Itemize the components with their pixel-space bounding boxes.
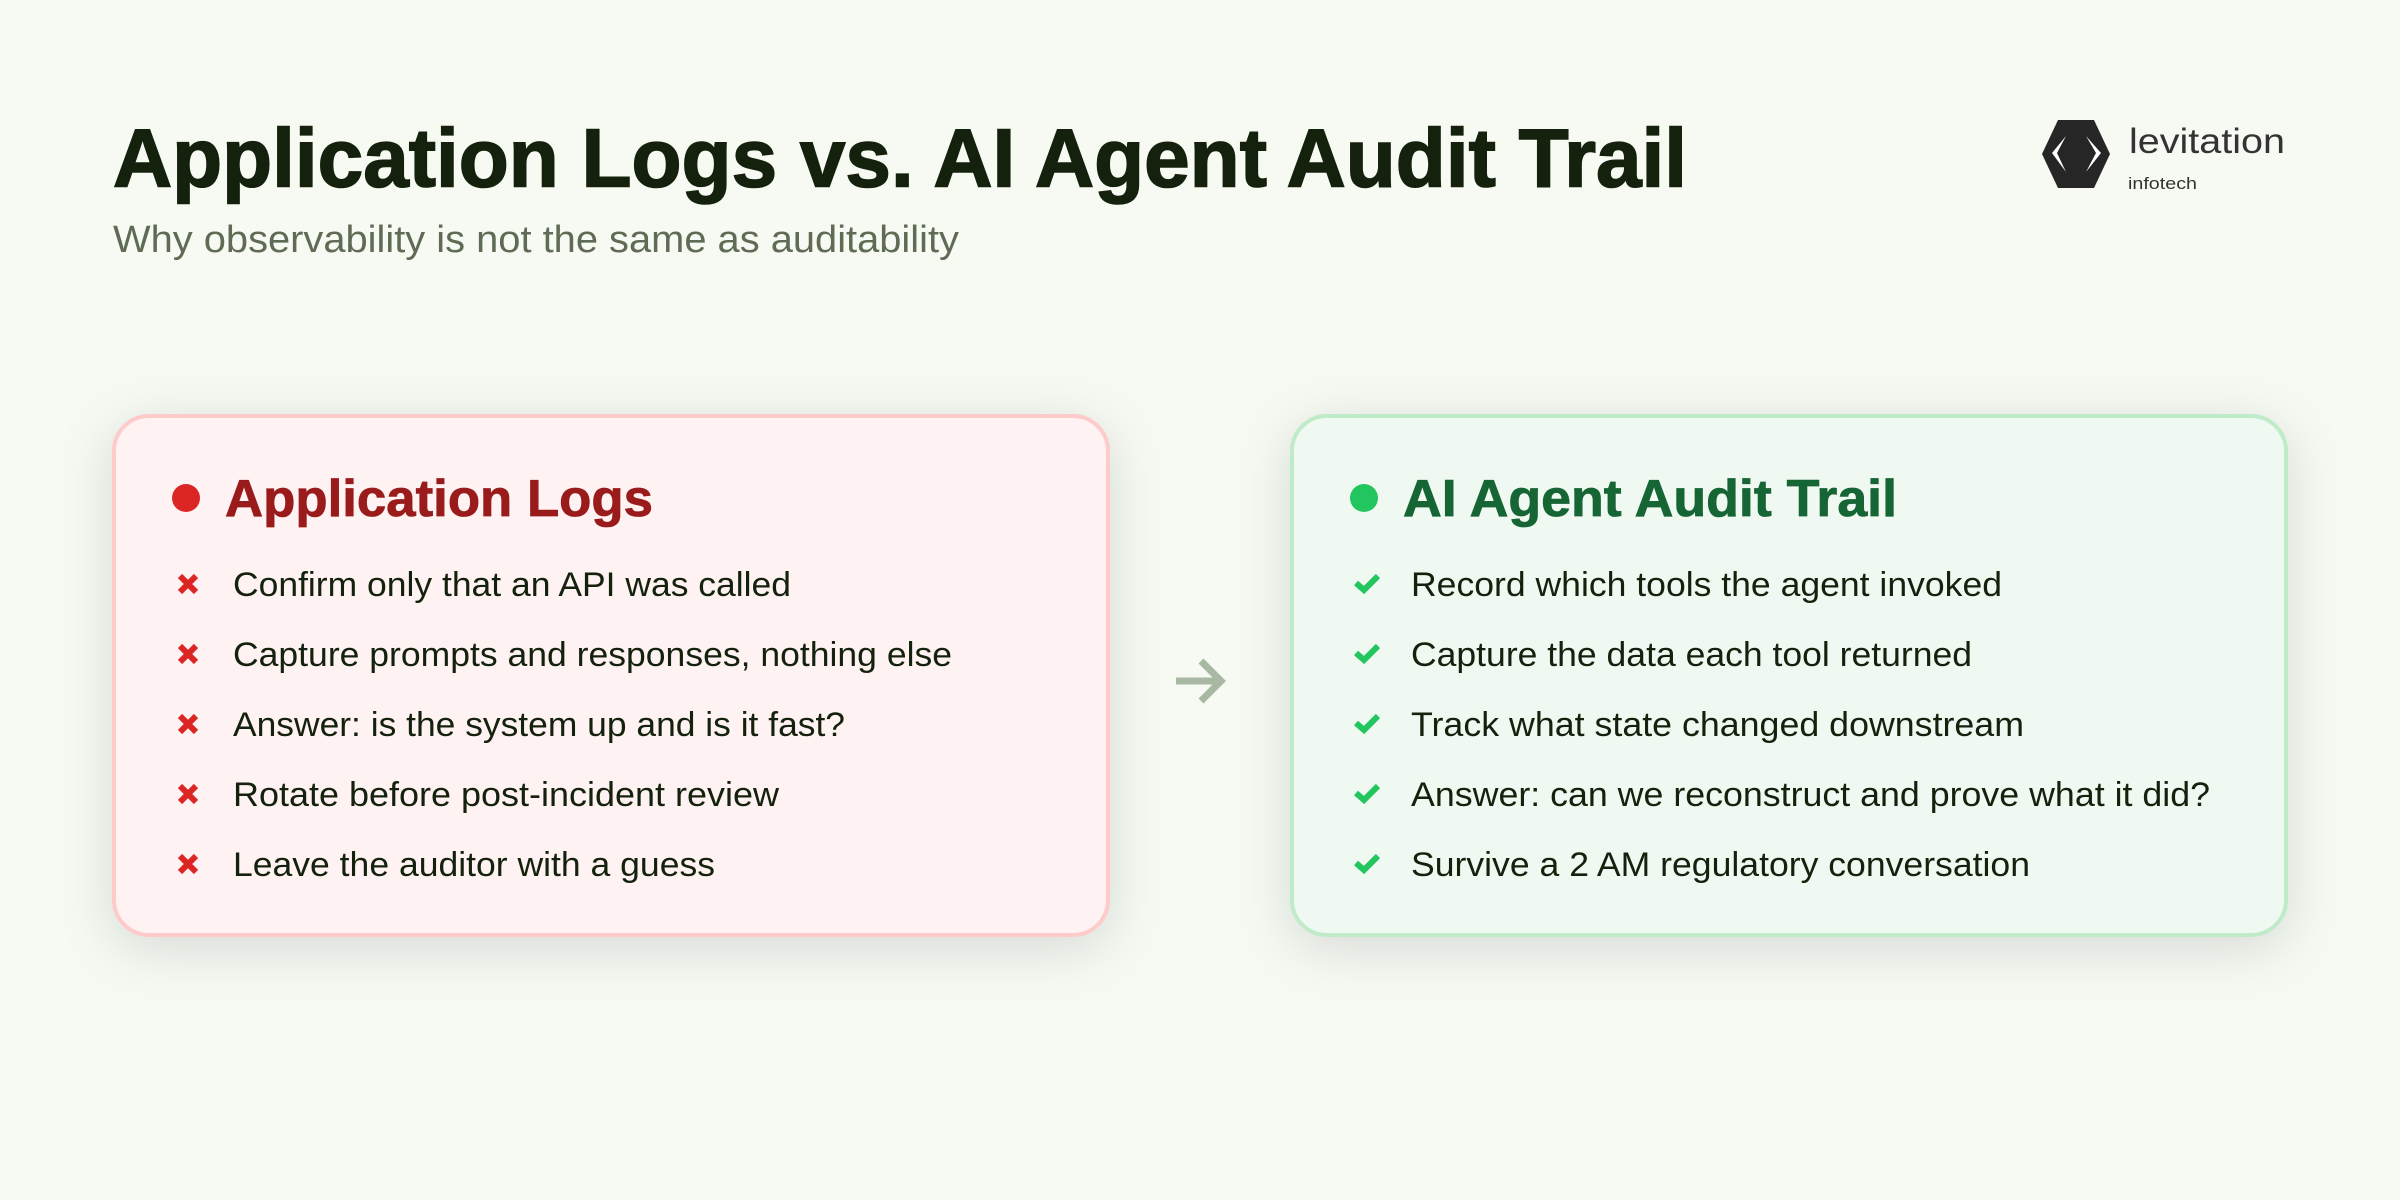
- list: application log limitations: [180, 566, 952, 884]
- item 4: Answer: can we reconstruct and prove what it did?: [1411, 776, 2210, 814]
- list: audit trail capabilities: [1356, 566, 2210, 884]
- item 2: Capture the data each tool returned: [1411, 636, 1972, 674]
- logo sub-wordmark: infotech: [2128, 174, 2197, 193]
- item 3: Answer: is the system up and is it fast?: [233, 706, 845, 744]
- item 4: Rotate before post-incident review: [233, 776, 779, 814]
- item 5: Leave the auditor with a guess: [233, 846, 715, 884]
- panel: application logs: [112, 416, 1110, 948]
- item 5: Survive a 2 AM regulatory conversation: [1411, 846, 2030, 884]
- item 1: Confirm only that an API was called: [233, 566, 791, 604]
- item 1: Record which tools the agent invoked: [1411, 566, 2002, 604]
- panel: ai agent audit trail: [1290, 416, 2288, 948]
- heading: application logs: Application Logs: [225, 470, 653, 528]
- status dot: green: [1350, 484, 1378, 512]
- item 2: Capture prompts and responses, nothing else: [233, 636, 952, 674]
- arrow: [1176, 661, 1222, 701]
- title: Application Logs vs. AI Agent Audit Trail: [113, 112, 1687, 204]
- item 3: Track what state changed downstream: [1411, 706, 2024, 744]
- subtitle: Why observability is not the same as auditability: [113, 219, 959, 261]
- logo wordmark: levitation: [2129, 122, 2285, 161]
- icon: hexagon with chevrons: [2042, 120, 2110, 188]
- status dot: red: [172, 484, 200, 512]
- heading: ai agent audit trail: AI Agent Audit Trail: [1403, 470, 1897, 528]
- logo: levitation infotech: [2042, 120, 2285, 193]
